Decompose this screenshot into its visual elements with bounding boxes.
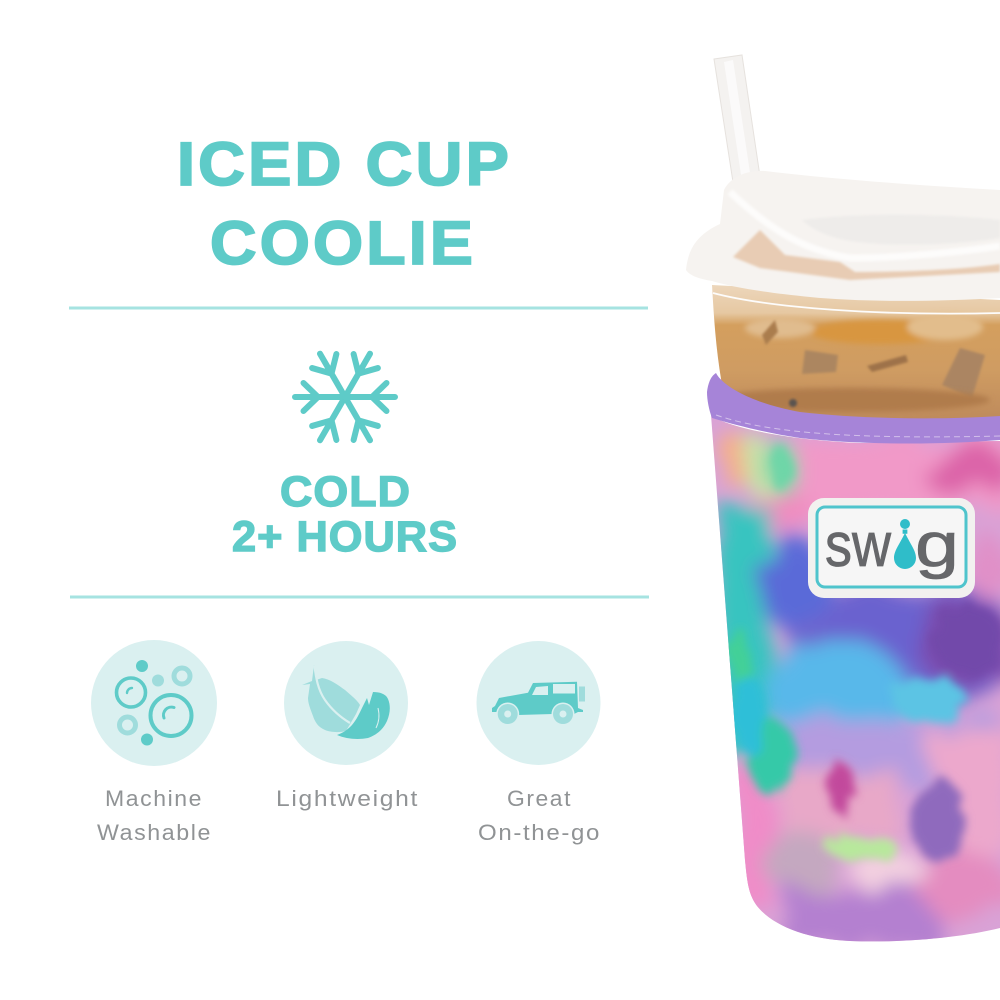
icon labels: On-the-go <box>478 820 601 845</box>
icon: great on-the-go jeep <box>476 641 600 765</box>
icon labels: Machine <box>105 786 203 811</box>
coolie body with watercolor print <box>700 400 1000 960</box>
straw <box>714 55 762 195</box>
rim stitching <box>716 415 1000 437</box>
cold duration heading: 2+ HOURS <box>232 513 458 561</box>
icon: snowflake <box>295 347 395 447</box>
divider <box>69 306 648 310</box>
plastic lid <box>686 171 1000 314</box>
swig logo badge: g <box>915 511 959 580</box>
icon labels: Great <box>507 786 572 811</box>
icon labels: Washable <box>97 820 212 845</box>
icon labels <box>97 786 601 845</box>
swig logo badge: i <box>899 521 911 577</box>
icon labels: Lightweight <box>276 786 419 811</box>
swig logo badge <box>808 498 975 598</box>
title: ICED CUP <box>177 130 512 198</box>
coolie purple rim <box>707 373 1000 444</box>
icon: machine washable bubbles <box>91 640 217 766</box>
cold duration heading <box>232 468 458 561</box>
title <box>177 130 512 277</box>
swig logo badge: sw <box>825 511 891 580</box>
iced coffee <box>712 285 1000 418</box>
icon: lightweight feather <box>284 641 408 765</box>
title: COOLIE <box>210 209 476 277</box>
cold duration heading: COLD <box>280 468 411 516</box>
divider <box>70 596 649 598</box>
product photo: iced cup with coolie <box>686 55 1000 960</box>
